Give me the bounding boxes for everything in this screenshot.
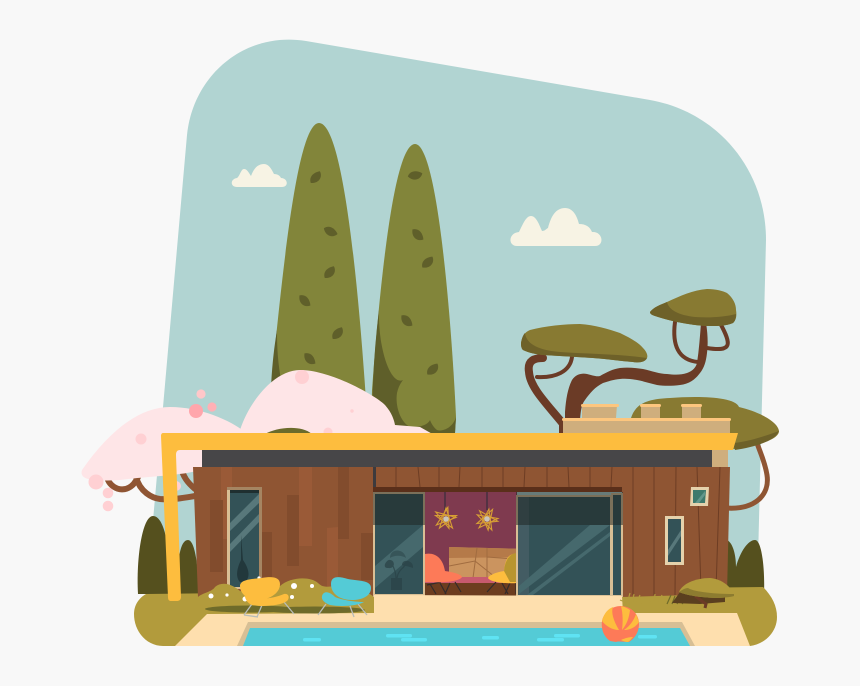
grass tufts bbox=[620, 593, 686, 604]
blossom dots bbox=[88, 370, 354, 511]
small green tree top bbox=[265, 428, 312, 434]
ground bbox=[134, 587, 777, 646]
bonsai tree: branches bbox=[529, 322, 728, 433]
cloud: left bbox=[232, 164, 287, 187]
plant silhouette bbox=[385, 550, 413, 590]
chair: yellow bbox=[487, 553, 517, 594]
sofa bbox=[449, 547, 527, 578]
chair: orange bbox=[425, 554, 462, 594]
window: tall left bbox=[227, 487, 262, 589]
bushes: far left bbox=[138, 516, 199, 594]
house: right wall bbox=[622, 467, 730, 597]
planting bed bbox=[198, 576, 374, 614]
sky blob bbox=[146, 40, 766, 600]
house: left wall bbox=[193, 467, 374, 597]
house: upper strip bbox=[373, 467, 625, 492]
window: small vertical right bbox=[665, 516, 684, 565]
tree: right cypress bbox=[371, 144, 456, 433]
chair: blue lounge bbox=[318, 577, 371, 617]
deck bbox=[175, 595, 750, 646]
window: small square right bbox=[690, 487, 709, 506]
pool bbox=[237, 622, 695, 646]
small tree by wall bbox=[672, 578, 734, 608]
floor bbox=[425, 583, 517, 596]
bonsai tree: left foliage bbox=[521, 324, 647, 362]
cherry tree: centre canopy bbox=[240, 370, 436, 436]
fascia bbox=[202, 450, 728, 467]
roof planters bbox=[562, 404, 731, 434]
tree: left cypress bbox=[270, 123, 368, 433]
cherry tree: branches bbox=[108, 467, 195, 499]
sliding door: left bbox=[373, 492, 425, 597]
chair: yellow lounge bbox=[240, 577, 294, 617]
cloud: right bbox=[510, 208, 601, 246]
cherry tree: left canopy bbox=[82, 407, 245, 481]
right tree: branch bbox=[726, 443, 767, 508]
right tree: foliage bbox=[631, 397, 779, 450]
beach ball bbox=[602, 606, 639, 642]
lamp: left bbox=[433, 492, 458, 529]
bonsai tree: trunk bbox=[565, 323, 708, 420]
yellow roof frame bbox=[161, 433, 738, 601]
bonsai tree: top foliage bbox=[650, 289, 736, 326]
interior room bbox=[425, 492, 527, 596]
bushes: far right bbox=[724, 540, 764, 594]
sliding door: right bbox=[516, 492, 623, 597]
lamp: right bbox=[473, 492, 502, 532]
